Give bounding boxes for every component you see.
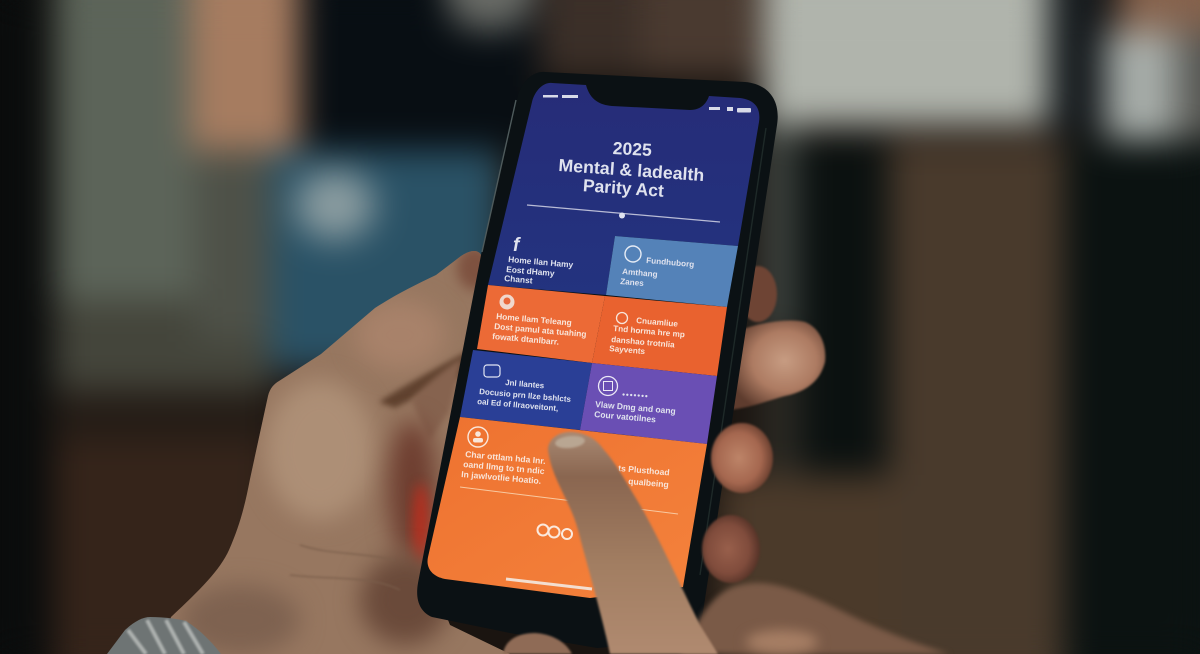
status bar: [543, 95, 751, 112]
card text: Home Ilam Teleang: [496, 311, 572, 328]
card text: [609, 316, 685, 356]
hand shading: [180, 246, 493, 654]
card text: Tnd horma hre mp: [613, 324, 685, 339]
card text left: Char ottlam hda Inr.: [465, 449, 546, 466]
home bar: [506, 579, 592, 589]
card text right: ts Plusthoad: [618, 463, 670, 477]
panel: purple card: [580, 363, 717, 444]
panel: navy card two: [460, 350, 592, 430]
title: Mental & ladealth: [558, 155, 705, 185]
card text: Vlaw Dmg and oang: [595, 399, 676, 416]
icon: round badge: [500, 294, 514, 310]
card text: oal Ed of Ilraoveitont,: [477, 397, 559, 413]
divider line: [460, 487, 678, 514]
card text: Dost pamul ata tuahing: [494, 321, 587, 339]
lower blurred hand: [680, 583, 950, 654]
panel: large orange card: [428, 417, 707, 598]
pointing index finger: [548, 432, 718, 654]
hand holding the phone: [160, 246, 510, 654]
panel: blue card: [606, 236, 738, 307]
palm and thumb: [160, 251, 510, 654]
phone bezel highlights: [482, 100, 516, 252]
card text left: [461, 449, 546, 486]
icon: round square: [598, 376, 618, 396]
panel: orange card left: [477, 285, 605, 363]
card text: danshao trotnlia: [611, 335, 675, 350]
card text left: In jawlvotlie Hoatio.: [461, 469, 542, 486]
card text: [594, 399, 676, 424]
card text left: oand Ilmg to tn ndic: [463, 459, 545, 476]
card text: Jnl Ilantes: [505, 378, 545, 390]
card text: Home Ilan Hamy: [508, 254, 574, 270]
right bezel line: [700, 128, 766, 575]
icon: timer: [616, 312, 628, 324]
fourth finger over phone edge: [702, 515, 760, 583]
third finger over phone edge: [711, 423, 773, 493]
panel: orange card right: [592, 296, 727, 376]
title divider: [527, 205, 720, 222]
logo circles: [538, 524, 572, 539]
card text: Fundhuborg: [646, 256, 695, 269]
card text: Chanst: [504, 273, 533, 285]
screen navy header: [488, 83, 759, 295]
card text: Docusio prn Ilze bshlcts: [479, 387, 572, 404]
title: [558, 138, 705, 201]
bottom thumb fragment: [503, 633, 572, 654]
card text: [492, 311, 587, 347]
card text: [504, 254, 574, 285]
title: 2025: [612, 138, 653, 160]
second finger behind phone: [728, 320, 825, 410]
wristwatch: [107, 617, 221, 654]
card text: fowatk dtanlbarr.: [492, 331, 559, 347]
card text right: [618, 463, 670, 490]
icon: clock: [625, 246, 641, 262]
title: Parity Act: [582, 175, 665, 201]
icon: f glyph: f: [513, 235, 521, 256]
card text: Cnuamliue: [636, 316, 679, 329]
card text: Eost dHamy: [506, 264, 555, 278]
smartphone: [417, 72, 778, 648]
card text right: qualbeing: [628, 476, 669, 490]
icon: person badge: [468, 427, 488, 447]
card text: Amthang: [622, 267, 658, 279]
upper finger behind phone: [739, 266, 777, 322]
fingernail highlight: [554, 434, 586, 450]
card text: Cour vatotilnes: [594, 409, 657, 424]
card text: Zanes: [620, 277, 645, 288]
card text: [477, 378, 572, 413]
icon: folder: [484, 365, 500, 377]
card text: [620, 256, 695, 288]
card text: Sayvents: [609, 344, 646, 356]
panel: navy card one: [504, 235, 574, 285]
phone body: [417, 72, 778, 648]
dots row: •••••••: [622, 390, 649, 401]
